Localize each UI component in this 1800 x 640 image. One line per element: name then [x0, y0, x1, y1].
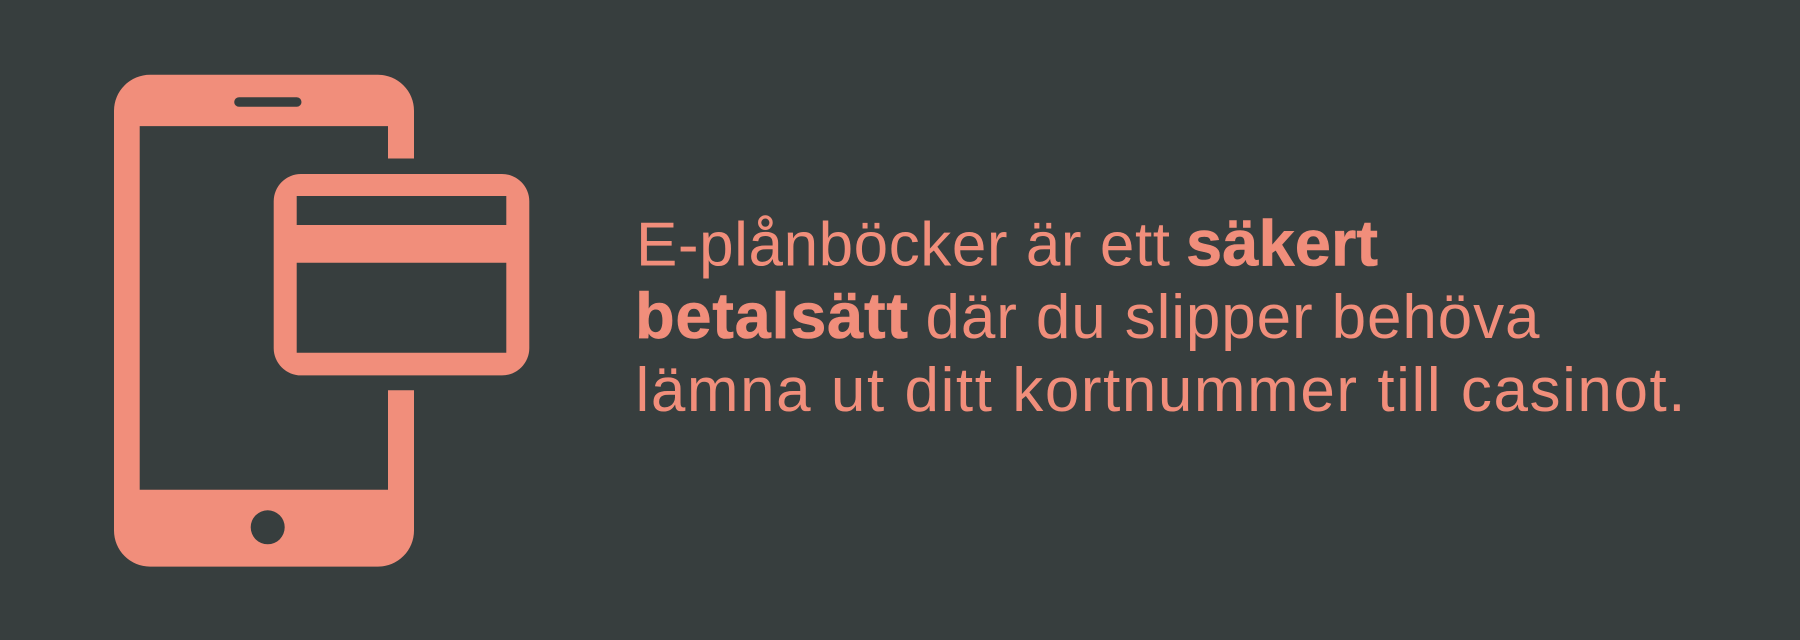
icon: smartphone [114, 75, 414, 567]
text block: e-wallet message [635, 206, 1686, 425]
icon: payment card [274, 174, 529, 375]
text line 1: säkert [1186, 206, 1378, 279]
text line 2: där du slipper behöva [926, 283, 1540, 352]
text line 1: E-plånböcker är ett [636, 210, 1170, 279]
text line 3: lämna ut ditt kortnummer till casinot. [636, 356, 1686, 425]
icon: phone with payment card [114, 75, 529, 567]
text line 2: betalsätt [635, 279, 908, 352]
